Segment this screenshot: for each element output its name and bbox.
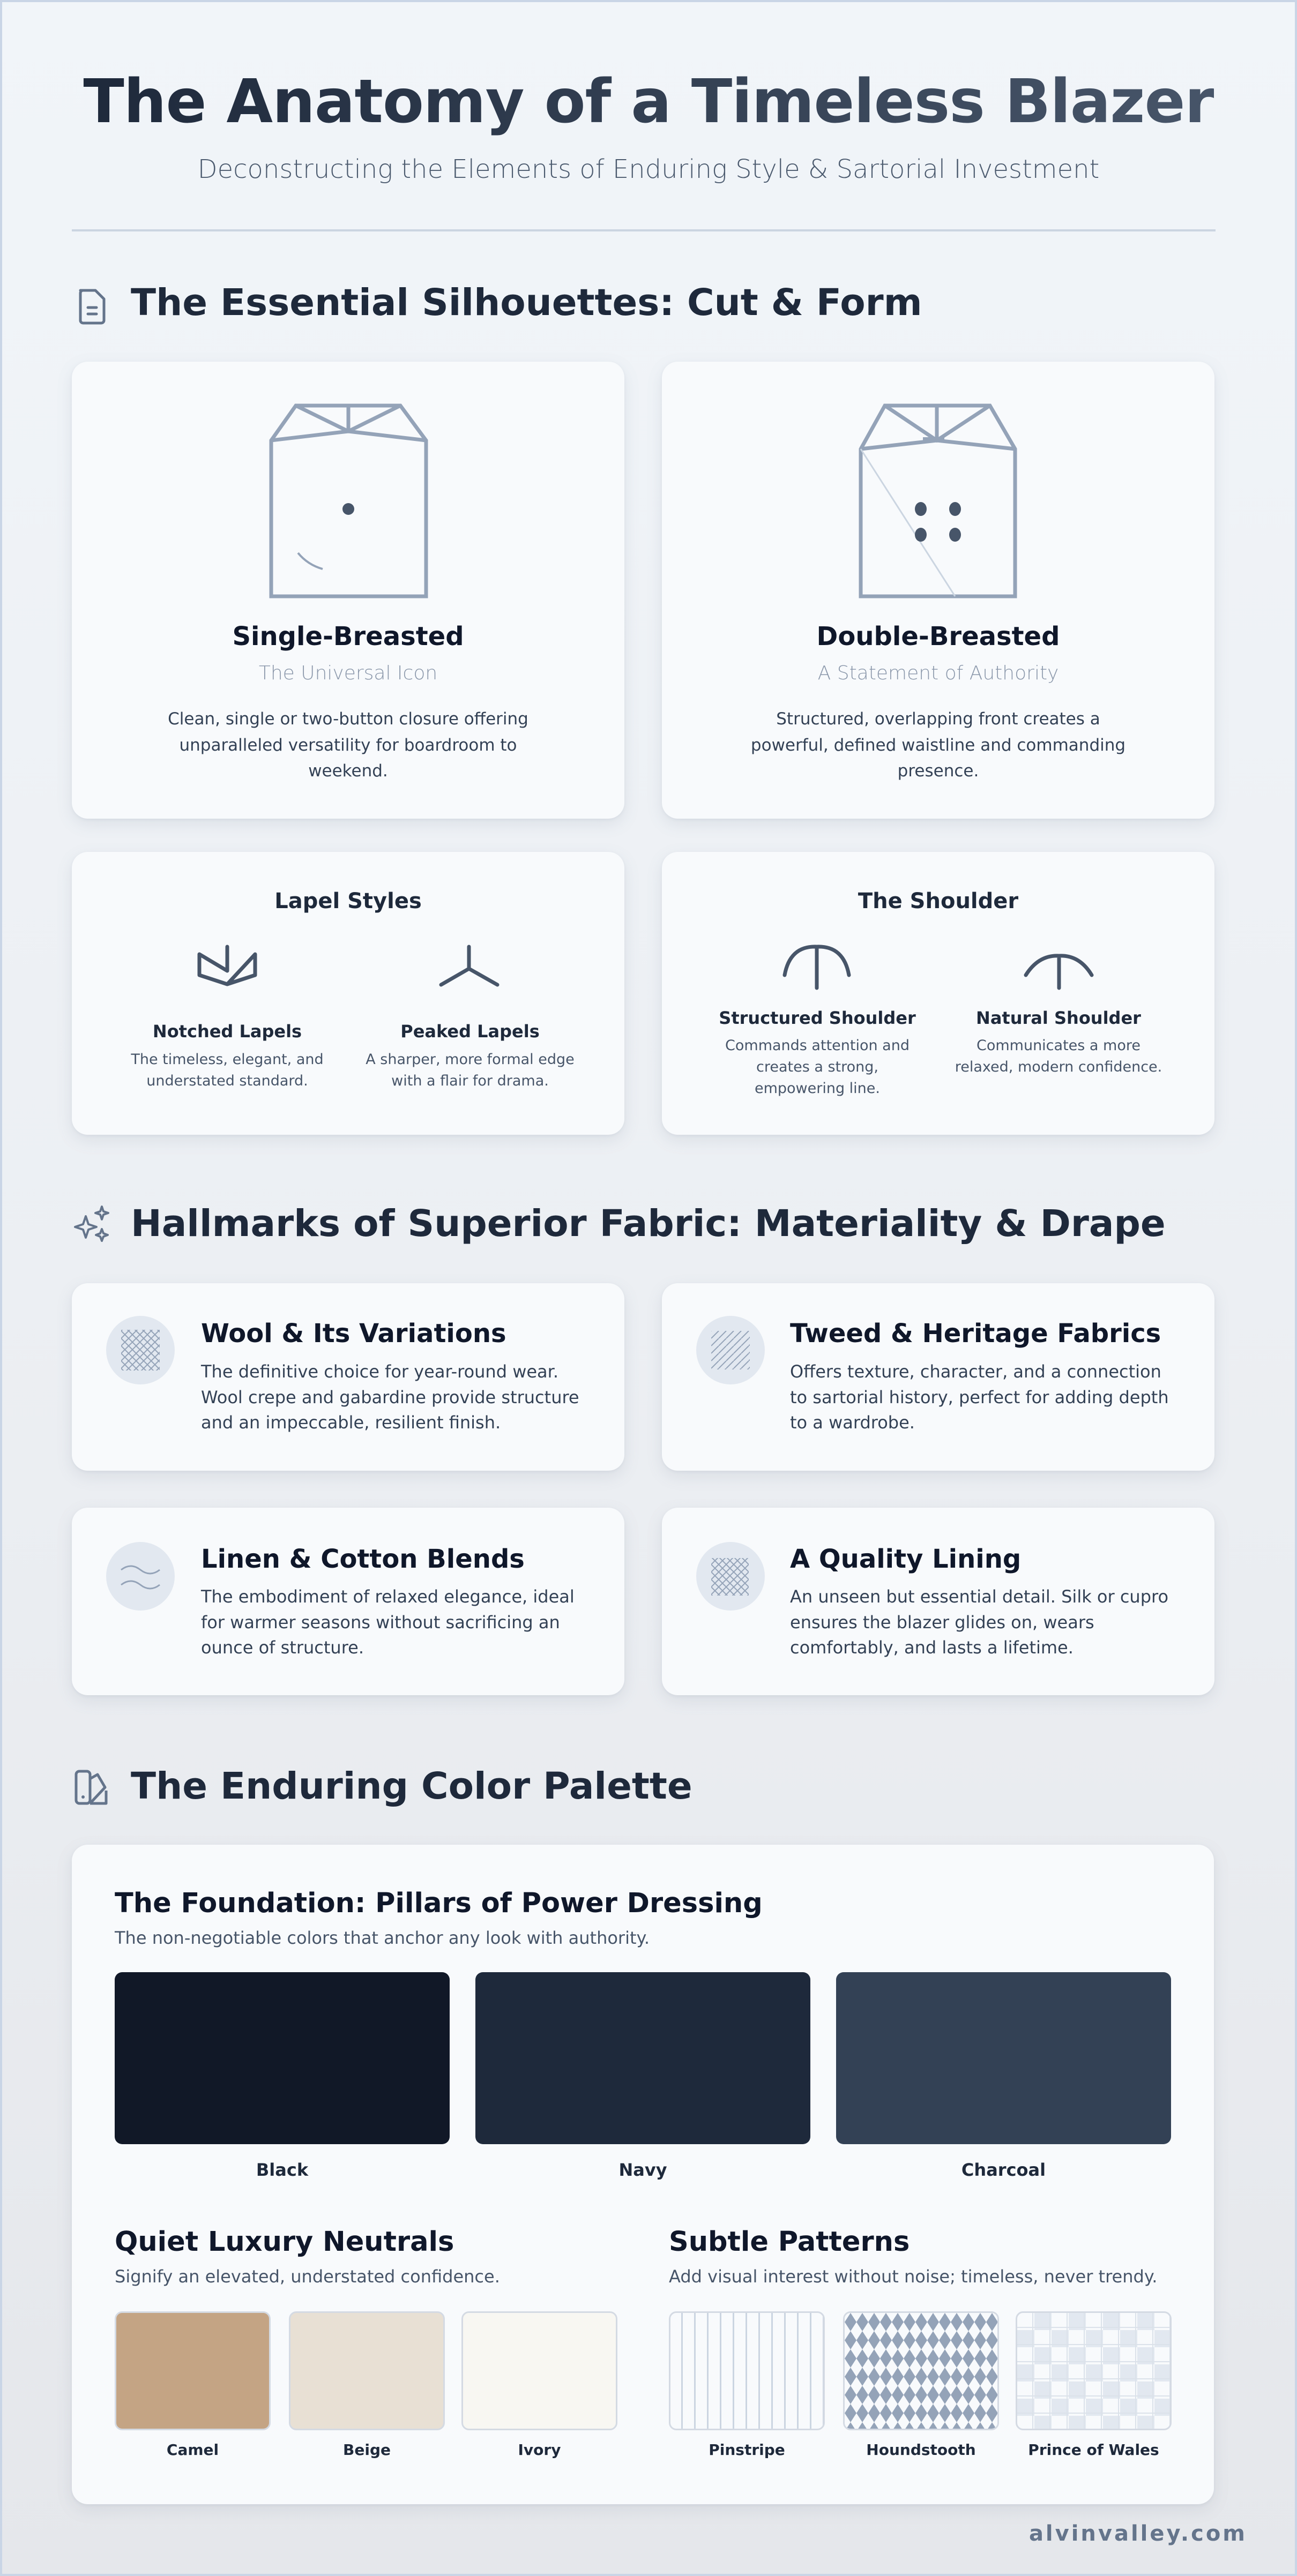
card: single-breasted: Single-Breasted	[232, 621, 464, 652]
panel: palette: Camel	[167, 2441, 219, 2459]
card: lining: An unseen but essential detail. Silk or cupro ensures the blazer glides on, wears comfortably, and lasts a lifetime.	[790, 1586, 1168, 1658]
natural label: Natural Shoulder	[976, 1008, 1141, 1028]
peaked label: A sharper, more formal edge	[366, 1051, 575, 1068]
card: shoulder: The Shoulder	[858, 889, 1018, 913]
card: linen: Linen & Cotton Blends	[201, 1544, 525, 1574]
icon: sparkles	[74, 1205, 109, 1242]
structured label: Commands attention and	[725, 1037, 910, 1054]
panel: palette: Prince of Wales	[1028, 2441, 1159, 2459]
swatch: prince of wales	[1016, 2311, 1172, 2430]
peaked label: with a flair for drama.	[391, 1073, 549, 1089]
card: linen: The embodiment of relaxed elegance, ideal for warmer seasons without sacrificing an ounce of structure.	[201, 1586, 575, 1658]
foundation heading: The Foundation: Pillars of Power Dressing	[115, 1888, 763, 1919]
panel: palette: The non-negotiable colors that anchor any look with authority.	[115, 1928, 650, 1948]
card: wool: The definitive choice for year-round wear. Wool crepe and gabardine provide structure and an impeccable, resilient finish.	[201, 1361, 579, 1433]
footer: site: alvinvalley.com	[1029, 2521, 1247, 2546]
swatch: ivory	[461, 2311, 617, 2430]
card: shoulder	[662, 852, 1214, 1135]
icon: document	[79, 289, 105, 325]
panel: palette: Charcoal	[961, 2160, 1046, 2180]
icon: lapels	[197, 945, 500, 987]
card: tweed: Offers texture, character, and a connection to sartorial history, perfect for adding depth to a wardrobe.	[790, 1361, 1169, 1433]
icon: lining	[696, 1542, 765, 1611]
card: double-breasted: Double-Breasted	[817, 621, 1060, 652]
icon: tweed	[696, 1316, 765, 1384]
card: single-breasted	[72, 362, 624, 819]
swatch: beige	[289, 2311, 445, 2430]
subtitle: Deconstructing the Elements of Enduring Style & Sartorial Investment	[198, 154, 1099, 184]
card: lining	[662, 1508, 1214, 1695]
card: single-breasted: The Universal Icon	[259, 662, 437, 684]
icon: single blazer	[269, 404, 428, 598]
structured label: empowering line.	[755, 1080, 880, 1097]
icon: double blazer	[859, 404, 1017, 598]
title: The Anatomy of a Timeless Blazer	[83, 67, 1214, 137]
structured label: creates a strong,	[756, 1059, 878, 1075]
swatch: pinstripe	[669, 2311, 825, 2430]
swatch: navy	[475, 1972, 810, 2144]
swatch: houndstooth	[843, 2311, 999, 2430]
card: lapel styles: Lapel Styles	[274, 889, 422, 913]
heading: fabric: Hallmarks of Superior Fabric: Materiality & Drape	[131, 1202, 1166, 1245]
card: wool: Wool & Its Variations	[201, 1319, 506, 1349]
panel: palette: Ivory	[518, 2441, 561, 2459]
icon: swatch	[75, 1770, 107, 1804]
icon: shoulders	[782, 945, 1093, 990]
natural label: relaxed, modern confidence.	[955, 1059, 1162, 1075]
peaked label: Peaked Lapels	[400, 1021, 540, 1042]
panel: palette: Black	[256, 2160, 308, 2180]
card: double-breasted: Structured, overlapping front creates a powerful, defined waistline and commanding presence.	[751, 709, 1125, 781]
icon: linen	[106, 1542, 175, 1611]
card: lining: A Quality Lining	[790, 1544, 1021, 1574]
card: tweed: Tweed & Heritage Fabrics	[790, 1319, 1161, 1349]
notched label: Notched Lapels	[153, 1021, 302, 1042]
heading: silhouettes: The Essential Silhouettes: Cut & Form	[131, 281, 922, 324]
structured label	[719, 1008, 916, 1097]
panel: palette: Add visual interest without noise; timeless, never trendy.	[669, 2266, 1157, 2287]
natural label: Communicates a more	[977, 1037, 1141, 1054]
icon: wool	[106, 1316, 175, 1384]
panel: palette: Houndstooth	[866, 2441, 976, 2459]
card: wool	[72, 1283, 624, 1471]
natural label	[955, 1008, 1162, 1075]
card: tweed	[662, 1283, 1214, 1471]
heading: palette: The Enduring Color Palette	[131, 1765, 692, 1808]
swatch: black	[115, 1972, 450, 2144]
card: double-breasted	[662, 362, 1214, 819]
notched label: The timeless, elegant, and	[131, 1051, 324, 1068]
panel: palette: Pinstripe	[709, 2441, 785, 2459]
card: linen	[72, 1508, 624, 1695]
card: double-breasted: A Statement of Authority	[818, 662, 1059, 684]
patterns heading: Subtle Patterns	[669, 2226, 910, 2258]
neutrals heading: Quiet Luxury Neutrals	[115, 2226, 454, 2258]
swatch: camel	[115, 2311, 271, 2430]
peaked label	[366, 1021, 575, 1089]
notched label: understated standard.	[146, 1073, 308, 1089]
panel: palette: Navy	[618, 2160, 667, 2180]
card: single-breasted: Clean, single or two-button closure offering unparalleled versatility for boardroom to weekend.	[168, 709, 528, 781]
panel: palette	[72, 1845, 1214, 2504]
panel: palette: Beige	[343, 2441, 391, 2459]
notched label	[131, 1021, 324, 1089]
panel: palette: Signify an elevated, understated confidence.	[115, 2266, 500, 2287]
card: lapel styles	[72, 852, 624, 1135]
swatch: charcoal	[836, 1972, 1171, 2144]
structured label: Structured Shoulder	[719, 1008, 916, 1028]
